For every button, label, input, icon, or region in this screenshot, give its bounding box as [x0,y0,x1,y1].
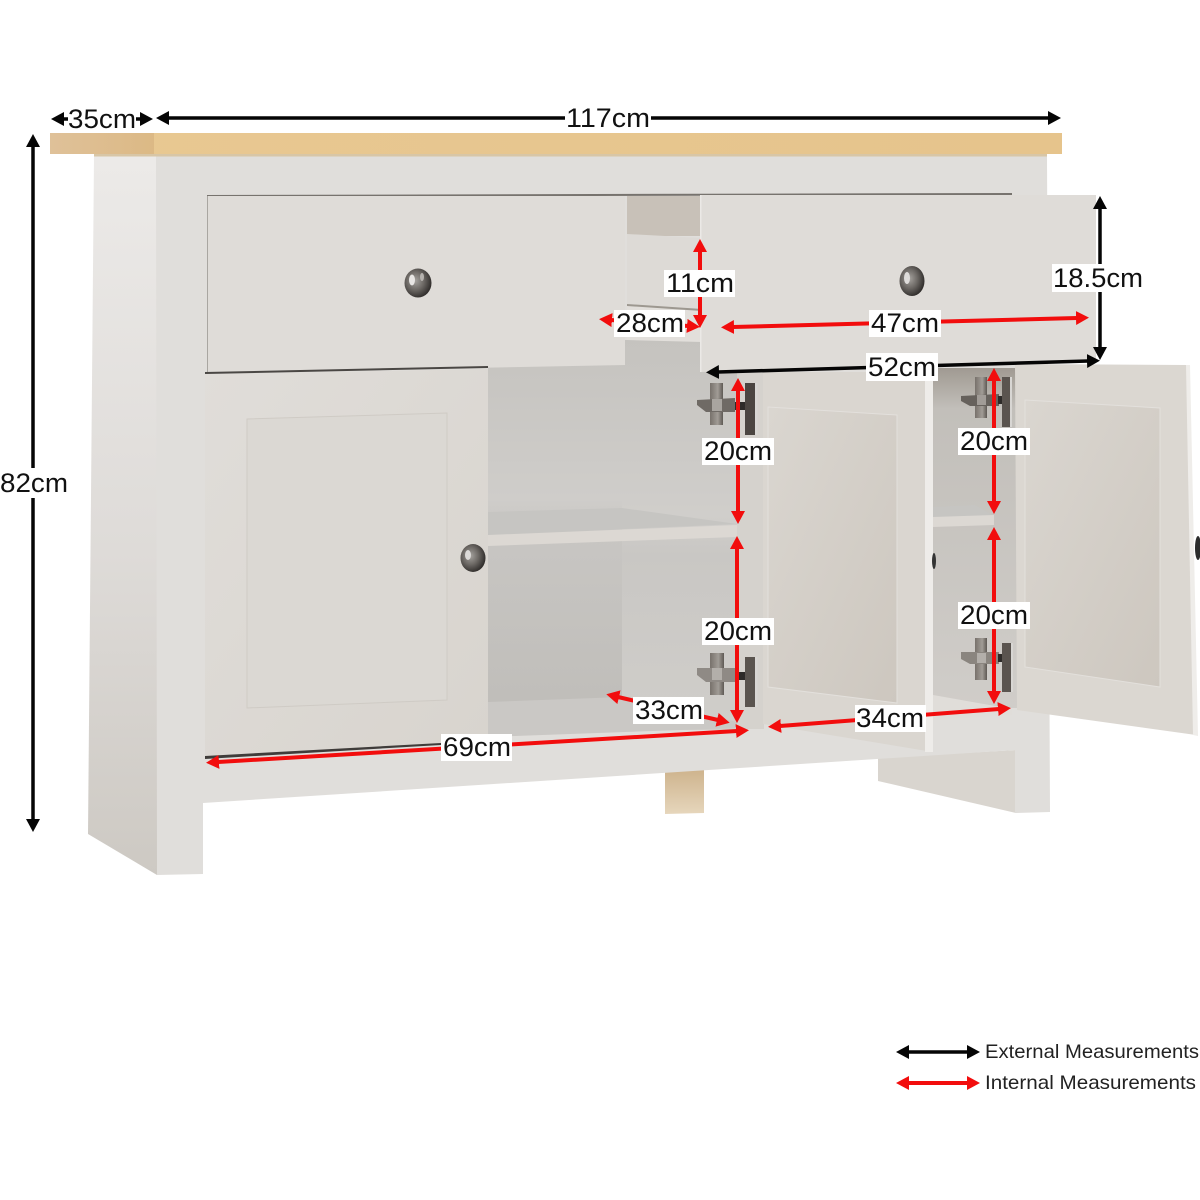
sideboard illustration [50,133,1200,875]
hinge: upper left [697,383,758,435]
dimension: interior drawer height 11cm: 11cm [666,268,734,298]
drawer gap shadow [207,193,1012,197]
dimension: interior drawer height 11cm [664,251,735,316]
dimension: interior drawer width 47cm [733,308,1077,338]
left side panel [88,156,157,875]
dimension: interior drawer depth 28cm: 28cm [616,308,684,338]
dimension: lower left shelf height 20cm: 20cm [704,616,772,646]
dimension: height 82cm: 82cm [0,468,68,498]
dimension: interior width 69cm: 69cm [443,732,511,762]
dimension: width 117cm: 117cm [566,103,650,133]
dimension: drawer height 18.5cm: 18.5cm [1053,263,1143,293]
sliver of right door knob [1195,536,1200,560]
dimension: upper left shelf height 20cm [702,390,774,512]
dimension: drawer width 52cm: 52cm [868,352,936,382]
dimension: interior depth 33cm: 33cm [635,695,703,725]
knob: right drawer [900,266,924,296]
interior shelf [488,508,737,546]
knob: left drawer [404,268,432,298]
dimension: upper right shelf height 20cm: 20cm [960,426,1028,456]
dimension: lower left shelf height 20cm [702,548,774,711]
dimension: width 117cm [168,103,1049,133]
dimension: depth 35cm: 35cm [68,104,136,134]
middle open door [763,372,933,752]
sliver of hidden knob [932,553,936,569]
dimension: upper left shelf height 20cm: 20cm [704,436,772,466]
dimension: lower right shelf height 20cm: 20cm [960,600,1028,630]
dimension: height 82cm [0,146,69,820]
wooden table top [50,133,1062,156]
knob: left door [460,544,486,572]
left closed door [205,369,488,757]
back right leg [878,750,1016,813]
dimension: drawer width 52cm [718,352,1088,382]
hinge: upper right [961,377,1012,427]
cabinet interior right [933,368,1018,720]
dimension: interior width 69cm [218,731,737,762]
dimension: interior drawer width 47cm: 47cm [871,308,939,338]
dimension: interior width 34cm: 34cm [856,703,924,733]
cabinet floor [488,697,737,737]
right pulled-out drawer [700,195,1096,372]
right open door [1015,364,1200,736]
dimension: upper right shelf height 20cm [958,380,1030,502]
cabinet front frame [156,156,1050,875]
right shelf [933,505,994,527]
dimension: interior depth 33cm [618,695,718,725]
legend: internal measurements: Internal Measurements [985,1072,1196,1094]
opening between drawers [627,196,707,342]
left closed drawer [207,196,625,373]
hinge: lower right [961,638,1013,692]
door bottom gap shadow [205,743,441,759]
centre wooden back leg [665,768,704,814]
drawer and door gap shadow [205,366,488,374]
dimension: drawer height 18.5cm [1052,208,1144,348]
legend: external measurements: External Measurements [985,1041,1199,1063]
cabinet interior left [488,340,764,737]
hinge: lower left [697,653,758,707]
dimension: interior width 34cm [780,703,999,733]
dimension: lower right shelf height 20cm [958,539,1030,692]
